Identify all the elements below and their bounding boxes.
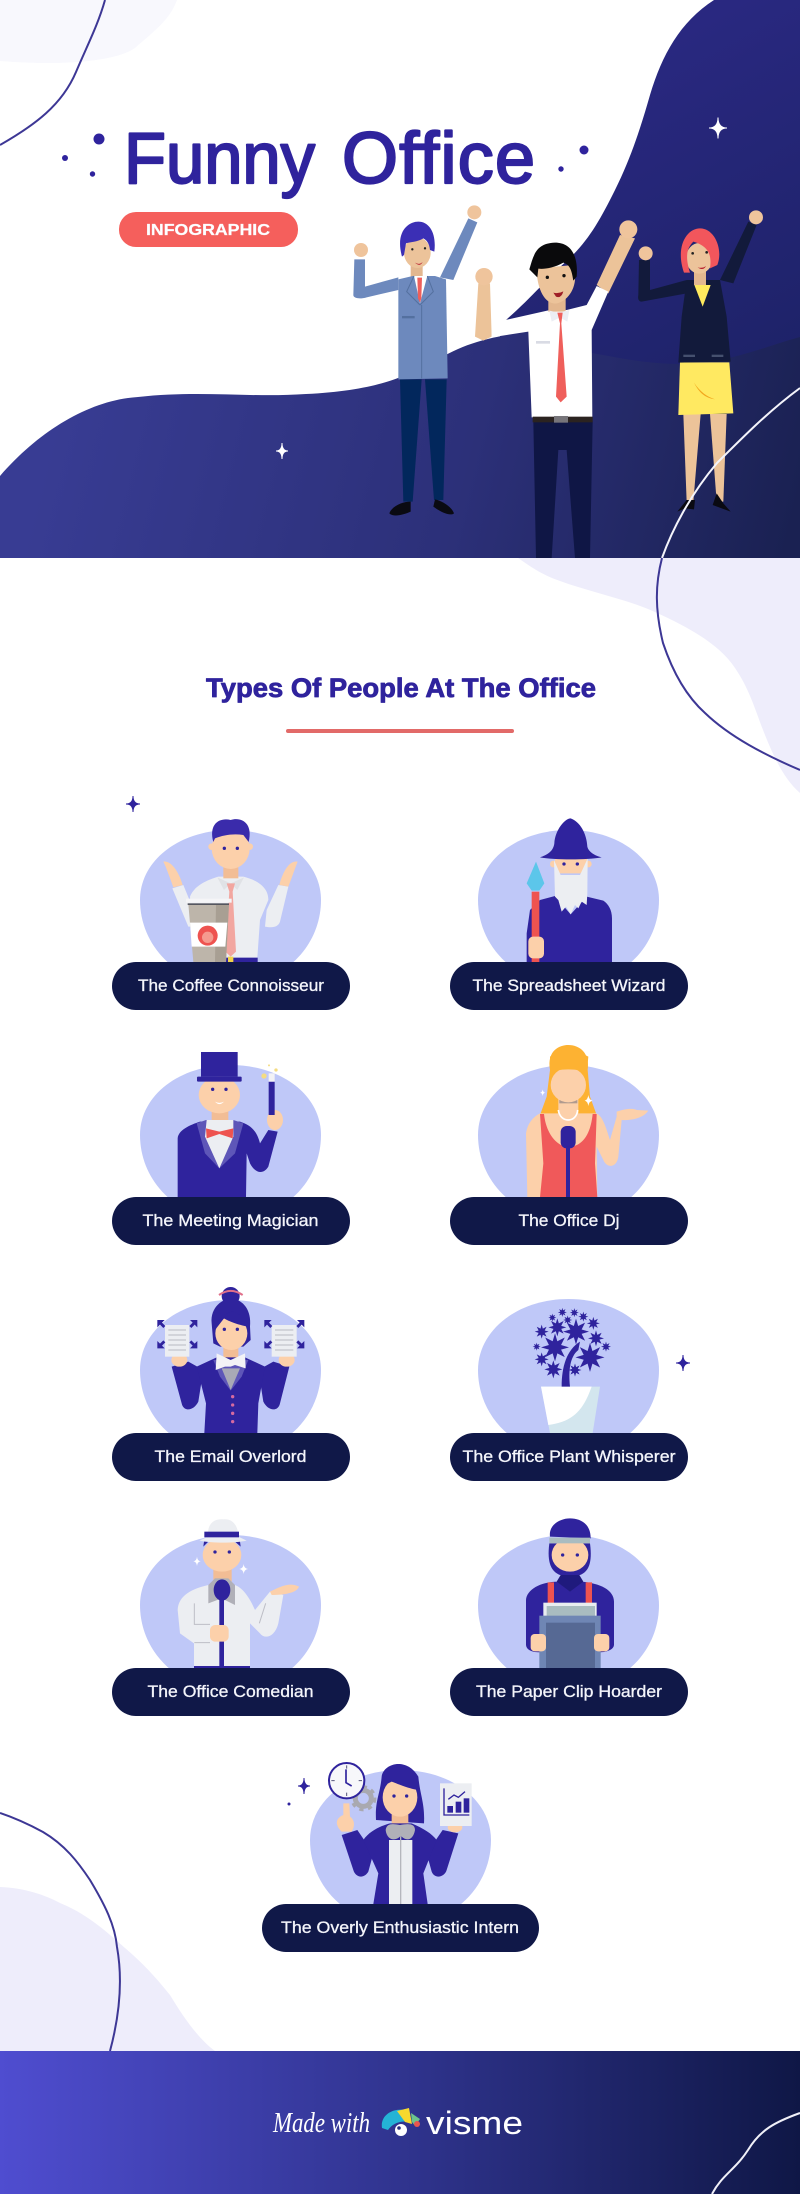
card: The Office Dj <box>450 1045 688 1245</box>
card: The Office Plant Whisperer <box>450 1299 688 1481</box>
backdrop circle <box>140 830 321 985</box>
icon: sparkle near intern <box>298 1778 310 1794</box>
curve: lower left decorative <box>0 1813 120 2051</box>
label pill: The Overly Enthusiastic Intern <box>281 1919 519 1937</box>
illustration: potted plant <box>533 1308 611 1433</box>
illustration: email woman <box>157 1287 304 1433</box>
curve: footer white <box>712 2113 800 2194</box>
label pill <box>112 1433 350 1481</box>
curve: right decorative <box>657 558 800 770</box>
icon: sparkle top right <box>709 118 727 138</box>
backdrop circle <box>478 830 659 985</box>
figures: three cheering workers <box>353 205 763 558</box>
icon: small dot near intern <box>288 1802 290 1806</box>
hero header panel <box>0 0 800 558</box>
card: The Meeting Magician <box>112 1052 350 1245</box>
decorative dots <box>62 134 588 177</box>
illustration: comedian <box>178 1519 299 1669</box>
label pill <box>262 1904 539 1952</box>
badge: infographic: INFOGRAPHIC <box>146 222 270 239</box>
label pill <box>112 1197 350 1245</box>
backdrop circle <box>310 1770 491 1925</box>
curve: top left <box>0 0 105 145</box>
label pill: The Email Overlord <box>154 1448 306 1466</box>
backdrop circle <box>140 1065 321 1220</box>
visme wordmark: visme <box>426 2105 523 2141</box>
backdrop circle <box>478 1535 659 1690</box>
backdrop circle <box>478 1065 659 1220</box>
label pill <box>450 1433 688 1481</box>
badge: infographic <box>119 212 298 247</box>
label pill: The Office Comedian <box>148 1683 314 1701</box>
footer panel <box>0 2051 800 2194</box>
card: The Spreadsheet Wizard <box>450 818 688 1010</box>
illustration: magician <box>178 1052 283 1197</box>
icon: sparkle near coffee <box>126 796 140 812</box>
card: The Office Comedian <box>112 1519 350 1716</box>
wave: front <box>0 330 800 558</box>
figure: man in white shirt <box>475 220 637 558</box>
label pill <box>450 1668 688 1716</box>
label pill <box>450 1197 688 1245</box>
card: The Coffee Connoisseur <box>112 819 350 1010</box>
label pill <box>450 962 688 1010</box>
section heading: Types Of People At The Office <box>206 673 596 703</box>
label pill: The Paper Clip Hoarder <box>476 1683 663 1701</box>
label pill: The Coffee Connoisseur <box>138 977 325 995</box>
card: The Paper Clip Hoarder <box>450 1518 688 1716</box>
icon: sparkle lower <box>276 443 288 459</box>
title <box>124 119 535 199</box>
illustration: intern <box>329 1763 472 1904</box>
illustration: paper hoarder <box>526 1518 614 1668</box>
illustration: wizard <box>527 818 612 962</box>
backdrop circle <box>478 1299 659 1455</box>
icon: visme logo <box>382 2108 420 2136</box>
wave: back <box>500 0 800 558</box>
label pill: The Office Plant Whisperer <box>462 1448 676 1466</box>
curve: white hero line <box>662 388 800 558</box>
heading underline <box>286 729 514 733</box>
illustration: coffee man <box>163 819 298 962</box>
blob: right decorative <box>518 558 800 793</box>
label pill: The Spreadsheet Wizard <box>472 977 666 995</box>
title: Office <box>342 119 535 199</box>
illustration: dj singer <box>526 1045 648 1197</box>
backdrop circle <box>140 1535 321 1690</box>
label pill <box>112 1668 350 1716</box>
card: The Email Overlord <box>112 1287 350 1481</box>
title: Funny <box>124 119 315 199</box>
blob: top left <box>0 0 177 63</box>
made with text: Made with <box>272 2108 370 2139</box>
backdrop circle <box>140 1300 321 1455</box>
card: The Overly Enthusiastic Intern <box>262 1763 539 1952</box>
figure: man in blue suit <box>353 205 481 515</box>
label pill: The Office Dj <box>518 1212 620 1230</box>
label pill <box>112 962 350 1010</box>
label pill: The Meeting Magician <box>142 1212 318 1230</box>
icon: sparkle near plant <box>676 1355 690 1371</box>
blob: lower left decorative <box>0 1887 215 2051</box>
figure: woman in yellow skirt <box>638 210 763 512</box>
